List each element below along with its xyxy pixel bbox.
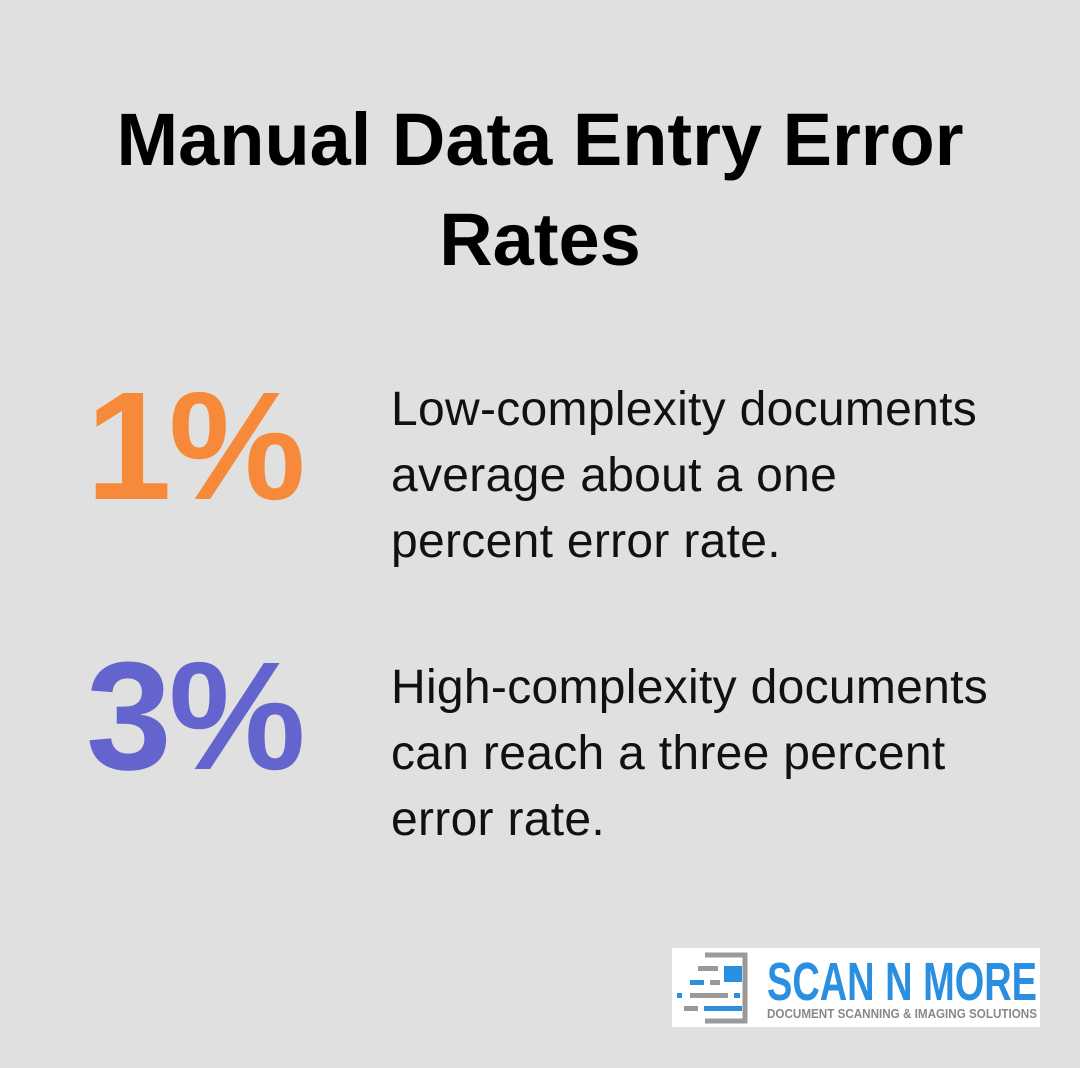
- title: Rates: [439, 198, 641, 281]
- stat 1 text: Low-complexity documents: [391, 383, 977, 436]
- stat 2 text: [391, 661, 988, 846]
- stat 2 number: 3%: [86, 630, 303, 802]
- stat 1 text: average about a one: [391, 449, 837, 502]
- stat 1 number: 1%: [86, 360, 303, 532]
- icon: scan bracket: [677, 955, 745, 1021]
- title: [116, 98, 964, 281]
- stat 2 text: error rate.: [391, 793, 605, 846]
- stat 2 text: High-complexity documents: [391, 661, 988, 714]
- stat 1 text: percent error rate.: [391, 515, 781, 568]
- stat 2 text: can reach a three percent: [391, 727, 946, 780]
- stat 1 text: [391, 383, 977, 568]
- logo: [672, 948, 1040, 1027]
- title: Manual Data Entry Error: [116, 98, 964, 181]
